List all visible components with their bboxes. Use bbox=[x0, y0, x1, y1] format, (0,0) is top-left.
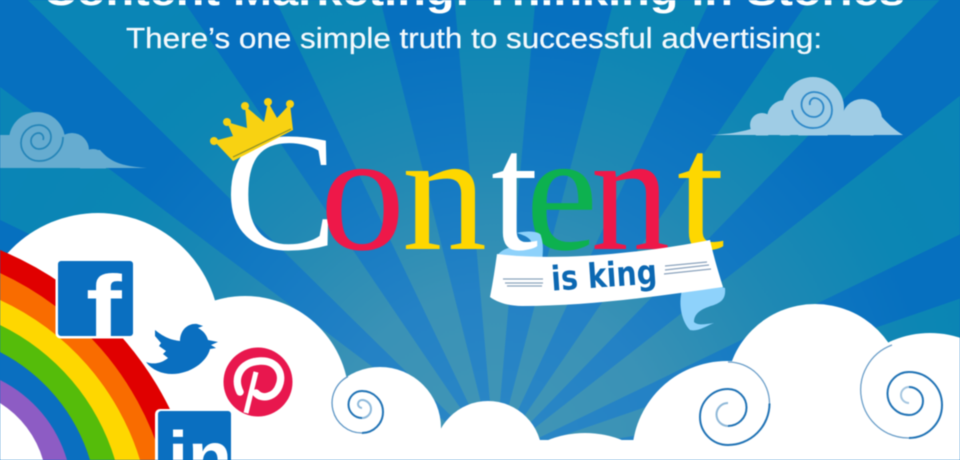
swirl: centre cloud bbox=[332, 376, 383, 433]
swirl: right cloud right bbox=[861, 345, 942, 438]
ribbon: is king bbox=[490, 98, 725, 330]
ribbon label: is king bbox=[550, 252, 658, 300]
cloud: top left bbox=[0, 112, 146, 169]
subtitle: There’s one simple truth to successful advertising: bbox=[126, 23, 822, 55]
white clouds bbox=[0, 213, 960, 460]
icon: facebook: f bbox=[86, 257, 122, 356]
icon: linkedin bbox=[155, 409, 233, 460]
headline word: Content: n bbox=[402, 98, 487, 286]
headline word: Content: o bbox=[320, 98, 405, 286]
headline word: Content: e bbox=[526, 97, 598, 286]
cloud: top right bbox=[710, 77, 903, 139]
rainbow bbox=[0, 250, 190, 460]
icon: pinterest bbox=[224, 348, 292, 416]
icon: crown bbox=[210, 98, 294, 161]
rainbow and white clouds bbox=[0, 213, 960, 460]
ribbon: is king: t bbox=[491, 98, 538, 286]
icon: twitter bird bbox=[146, 324, 218, 374]
headline word: Content: C bbox=[224, 98, 337, 286]
headline word: Content: t bbox=[677, 98, 724, 286]
swirl: right cloud left bbox=[700, 362, 770, 445]
icon: facebook bbox=[56, 257, 136, 356]
headline word: Content bbox=[224, 97, 724, 286]
headline word: Content: n bbox=[591, 98, 670, 286]
